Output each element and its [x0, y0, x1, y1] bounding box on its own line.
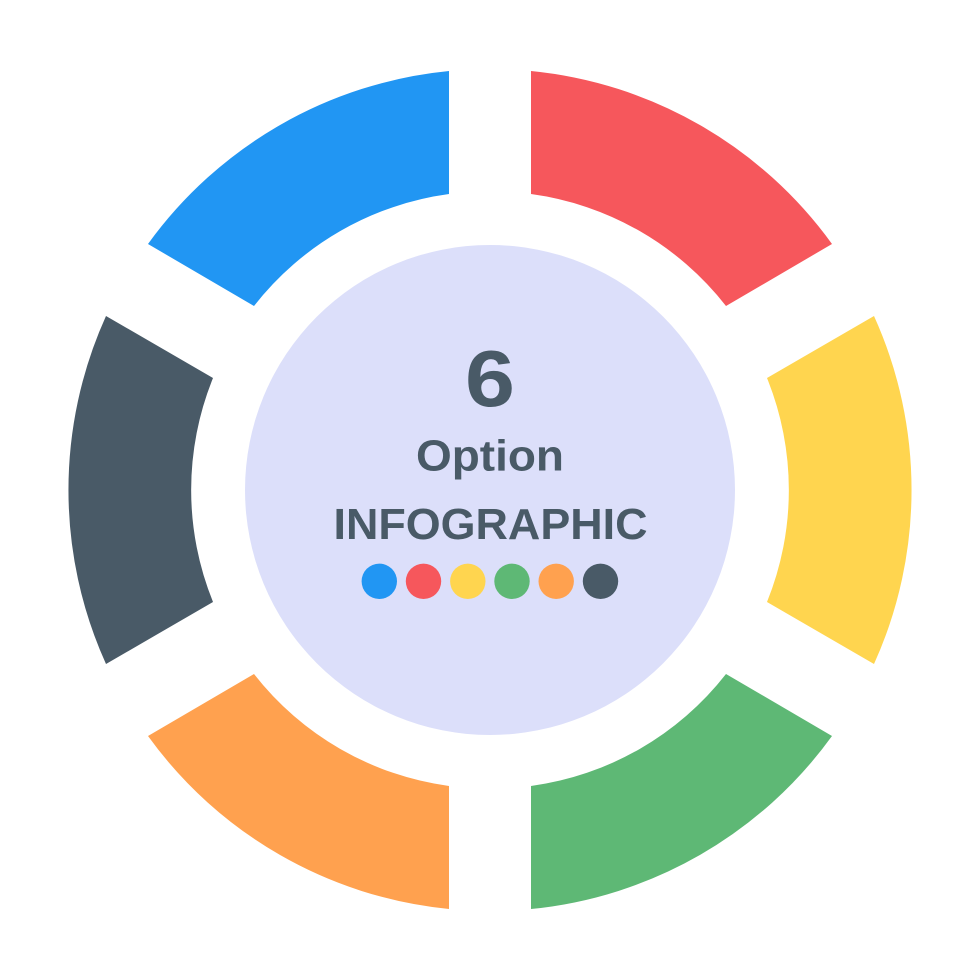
number 6: 6 [465, 334, 515, 423]
segment: blue [148, 71, 449, 306]
segment: orange [148, 674, 449, 909]
segment: red [531, 71, 832, 306]
segment: yellow [767, 316, 912, 664]
color dots legend [362, 564, 618, 599]
center circle [245, 245, 735, 735]
segment: green [531, 674, 832, 909]
segment: dark slate [68, 316, 213, 664]
heading: INFOGRAPHIC: INFOGRAPHIC [334, 500, 648, 549]
heading: Option: Option [416, 432, 564, 480]
